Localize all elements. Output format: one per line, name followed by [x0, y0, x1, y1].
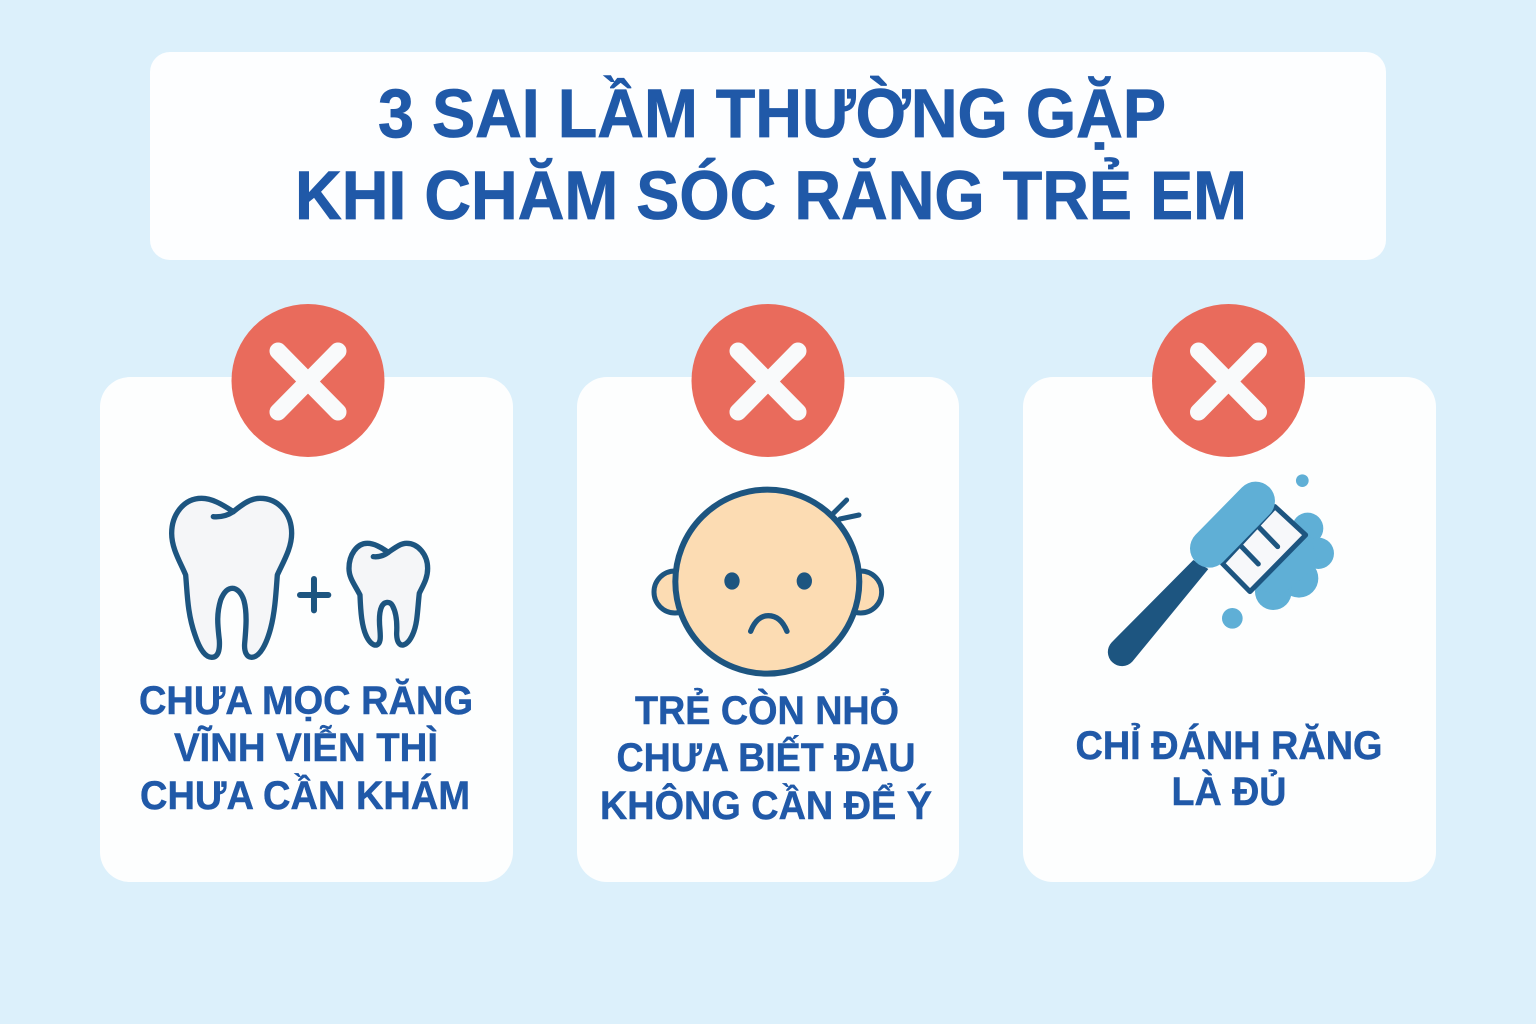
title text: 3 SAI LẦM THƯỜNG GẶP: [378, 75, 1166, 152]
text: mistake 2: TRẺ CÒN NHỎ: [635, 687, 899, 733]
icon: large tooth plus small tooth: [172, 498, 428, 657]
text: mistake 1: VĨNH VIỄN THÌ: [174, 724, 438, 770]
text: mistake 1: CHƯA CẦN KHÁM: [140, 772, 470, 818]
text: mistake 2: [600, 687, 932, 828]
icon: sad baby face: [654, 490, 882, 674]
text: mistake 2: CHƯA BIẾT ĐAU: [616, 734, 916, 780]
text: mistake 1: [139, 678, 473, 818]
text: mistake 3: LÀ ĐỦ: [1172, 768, 1286, 814]
icon: red cross badge 1: [232, 304, 384, 457]
panel: mistake 3: [1023, 304, 1436, 882]
icon: red cross badge 3: [1152, 304, 1305, 457]
panel: mistake 2: [577, 304, 959, 882]
text: mistake 2: KHÔNG CẦN ĐỂ Ý: [600, 781, 932, 828]
title text: [295, 75, 1247, 234]
title panel: [150, 52, 1386, 260]
text: mistake 3: [1076, 722, 1382, 814]
title text: KHI CHĂM SÓC RĂNG TRẺ EM: [295, 157, 1247, 234]
icon: red cross badge 2: [692, 304, 844, 457]
icon: toothbrush with foam: [1108, 474, 1334, 666]
text: mistake 3: CHỈ ĐÁNH RĂNG: [1076, 722, 1382, 768]
text: mistake 1: CHƯA MỌC RĂNG: [139, 678, 473, 723]
panel: mistake 1: [100, 304, 513, 882]
